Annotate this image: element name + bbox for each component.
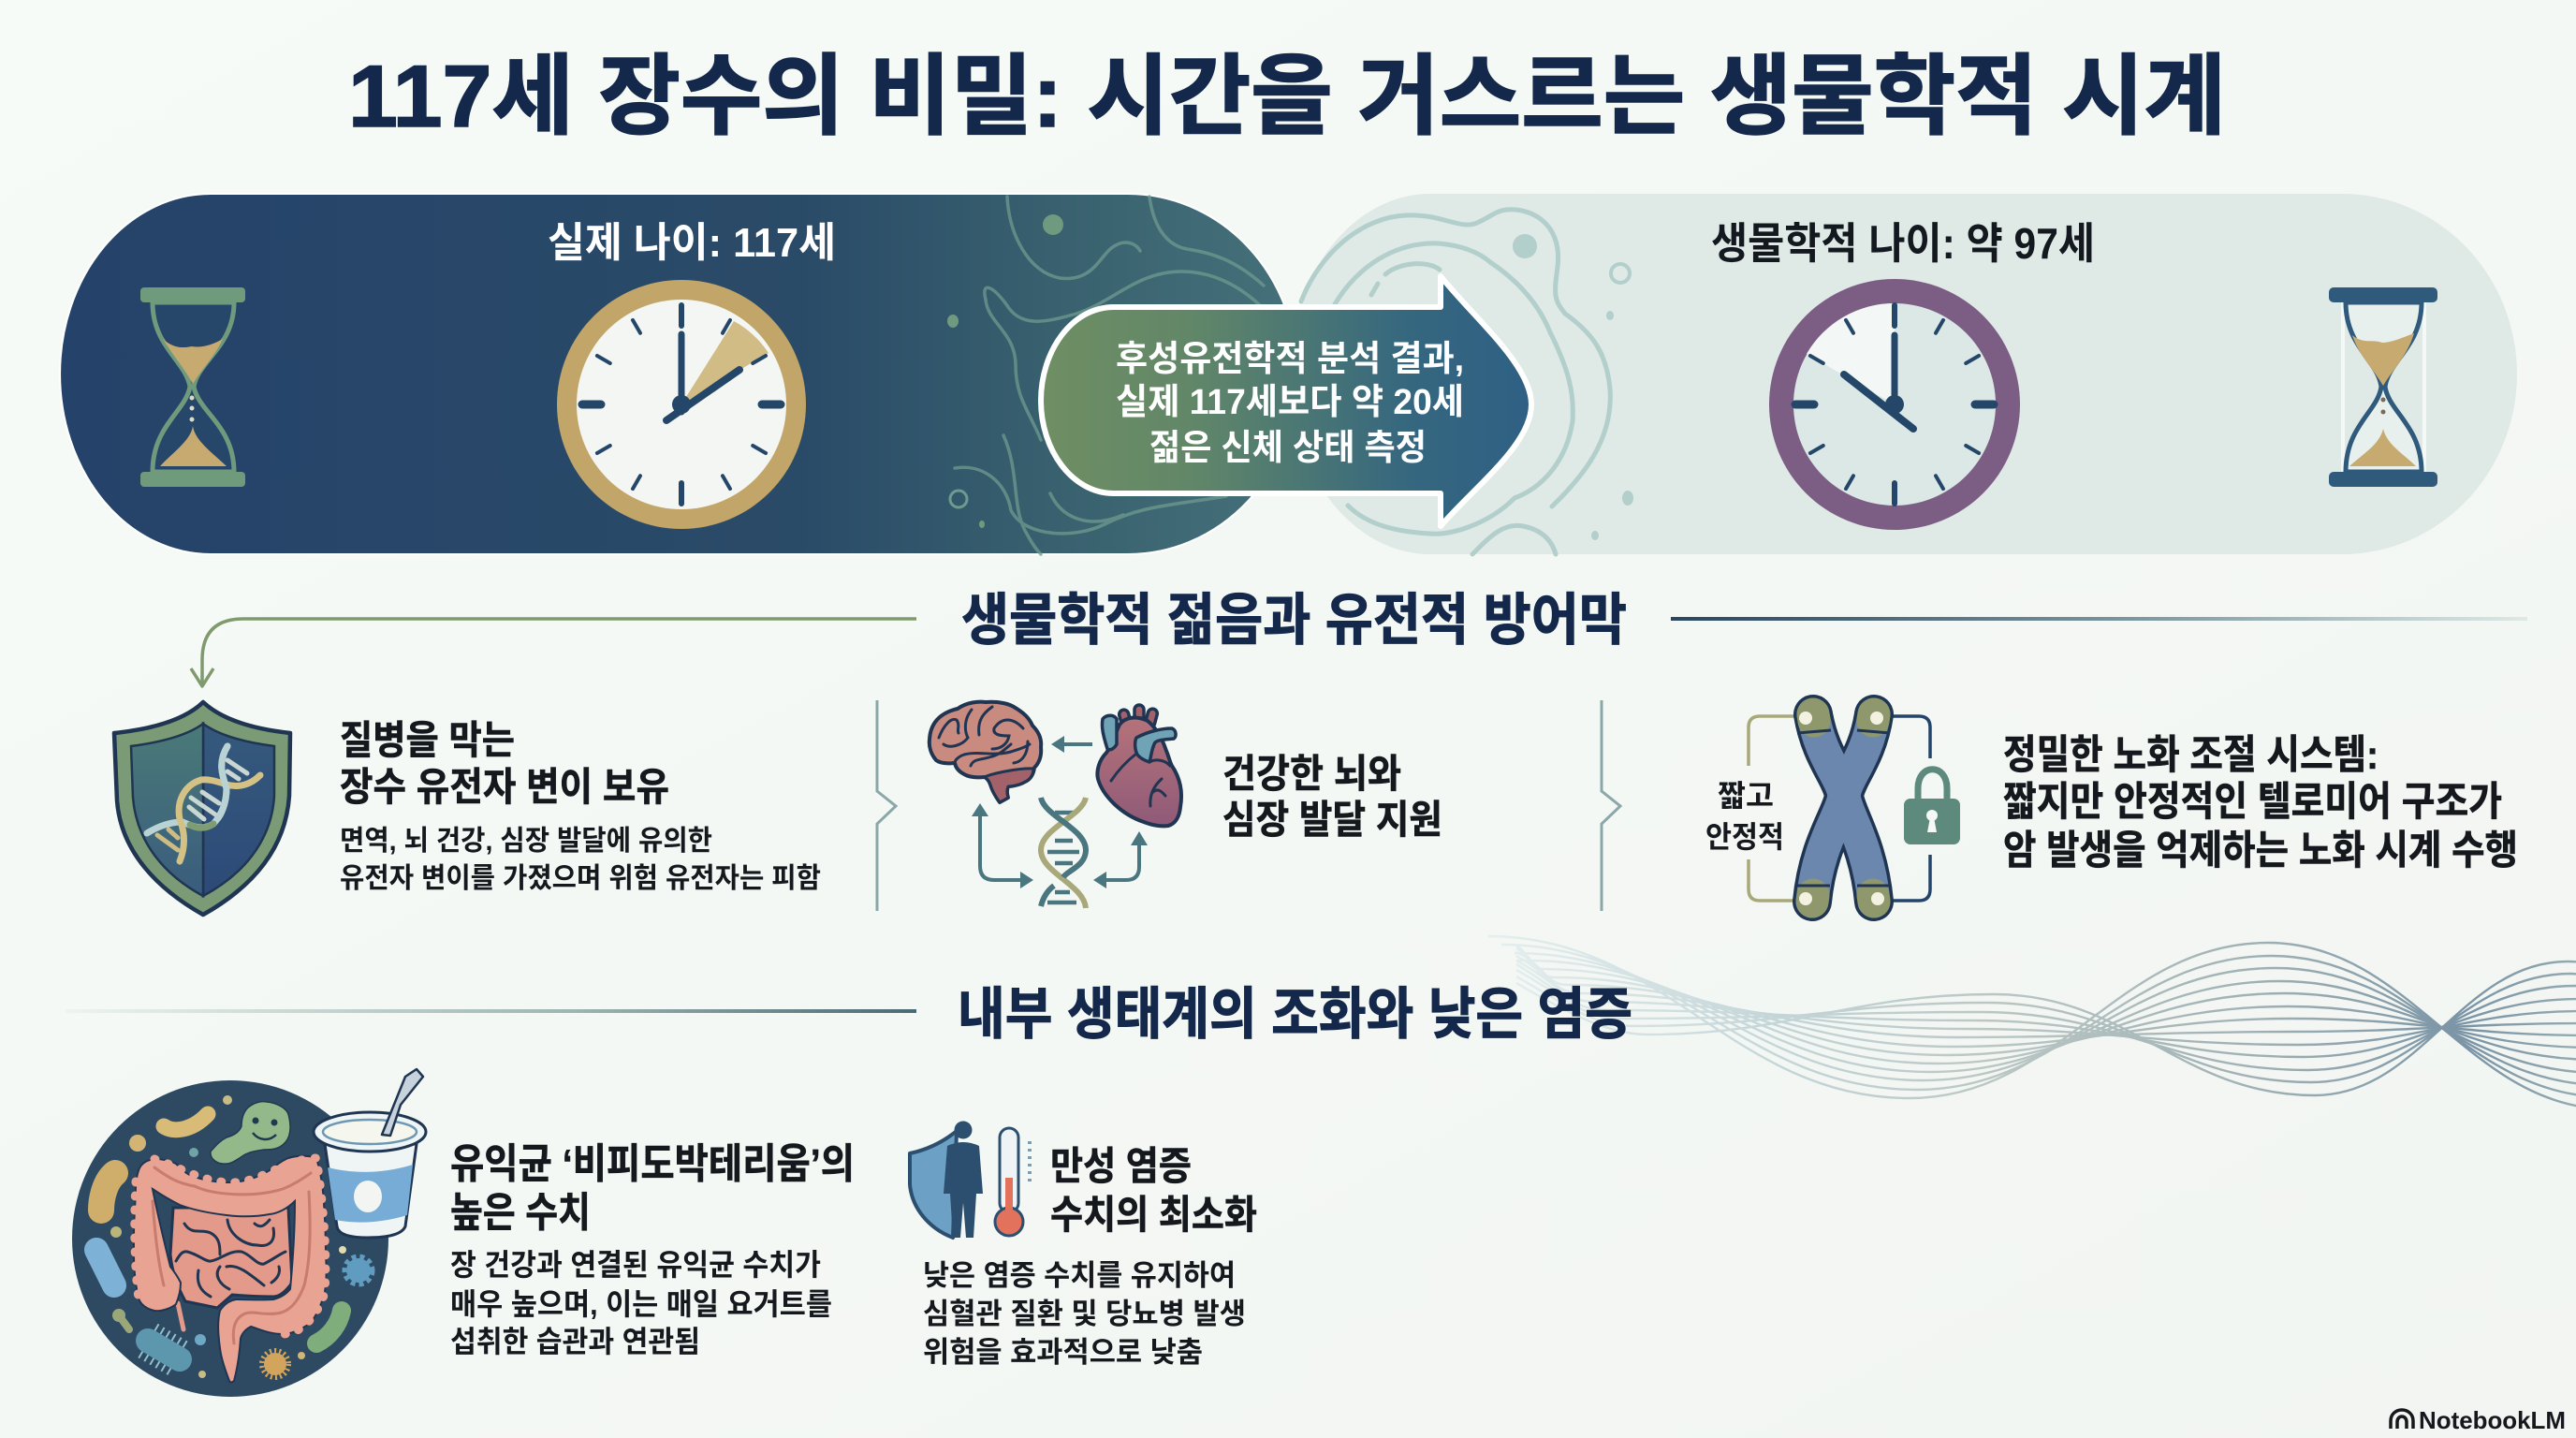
icon: chromosome with telomere lock [1749,712,1960,905]
text block: bifidobacterium: 유익균 ‘비피도박테리움’의 [450,1141,855,1187]
text block: aging control system: 짧지만 안정적인 텔로미어 구조가 [2003,780,2502,825]
icon: clock biological age [1769,279,2020,530]
large intestine [134,1156,327,1382]
icon: gut microbiome [72,1069,426,1397]
icon: brain [929,702,1041,802]
label: short and stable: 안정적 [1705,820,1784,854]
icon: clock actual age [557,280,806,529]
text block: aging control system: 정밀한 노화 조절 시스템: [2003,733,2378,778]
arrow: section connector [191,619,916,686]
text: healthy brain and heart: 건강한 뇌와 [1222,752,1401,796]
text: healthy brain and heart: 심장 발달 지원 [1222,798,1442,842]
text block: chronic inflammation: 만성 염증 [1050,1144,1192,1188]
logo: NotebookLM: NotebookLM [2419,1406,2566,1434]
text block: chronic inflammation: 낮은 염증 수치를 유지하여 [923,1259,1236,1292]
icon: hourglass navy panel [140,287,245,487]
text block: chronic inflammation [923,1144,1257,1369]
label: biological age: 생물학적 나이: 약 97세 [1711,219,2095,268]
text block: longevity variants: 질병을 막는 [340,718,515,762]
text block: bifidobacterium: 섭취한 습관과 연관됨 [450,1325,700,1358]
text block: longevity variants: 유전자 변이를 가졌으며 위험 유전자는 피함 [340,863,821,894]
text block: longevity variants [340,718,821,894]
heading: internal ecosystem: 내부 생태계의 조화와 낮은 염증 [958,983,1632,1046]
text block: bifidobacterium: 매우 높으며, 이는 매일 요거트를 [450,1287,832,1321]
bacteria [96,1095,373,1378]
arrow: callout: 젊은 신체 상태 측정 [1149,429,1427,468]
small intestine [170,1208,292,1308]
label: short and stable: 짧고 [1718,779,1774,813]
text block: bifidobacterium: 장 건강과 연결된 유익균 수치가 [450,1248,821,1282]
title: 117세 장수의 비밀: 시간을 거스르는 생물학적 시계 [348,47,2226,145]
panel: biological age pill [1290,194,2517,554]
text block: aging control system [2003,733,2518,873]
arrows: body connections [972,736,1148,888]
arrow: callout: 후성유전학적 분석 결과, [1116,340,1464,379]
decorative wave [1488,936,2576,1109]
label: short and stable [1705,779,1784,854]
text: healthy brain and heart [1222,752,1442,842]
divider: chevron one [877,700,896,911]
icon: person shield thermometer [910,1122,1030,1238]
heading: biological youth: 생물학적 젊음과 유전적 방어막 [961,589,1627,652]
divider: chevron two [1602,700,1620,911]
text block: chronic inflammation: 심혈관 질환 및 당뇨병 발생 [923,1298,1246,1330]
icon: dna shield [114,702,290,915]
yogurt cup [314,1069,426,1238]
icon: hourglass light panel [2329,287,2437,487]
text block: chronic inflammation: 위험을 효과적으로 낮춤 [923,1336,1203,1369]
arrow: callout [1041,276,1531,526]
text block: chronic inflammation: 수치의 최소화 [1050,1193,1257,1237]
text block: longevity variants: 면역, 뇌 건강, 심장 발달에 유의한 [340,826,712,857]
panel: actual age pill [60,194,1297,554]
text block: bifidobacterium [450,1141,855,1358]
text block: longevity variants: 장수 유전자 변이 보유 [340,765,669,809]
text block: bifidobacterium: 높은 수치 [450,1190,591,1236]
icon: dna helix [1041,798,1086,908]
icon: heart [1097,705,1181,826]
text block: aging control system: 암 발생을 억제하는 노화 시계 수행 [2003,829,2518,873]
arrow: callout: 실제 117세보다 약 20세 [1116,383,1464,422]
label: actual age: 실제 나이: 117세 [548,220,836,266]
